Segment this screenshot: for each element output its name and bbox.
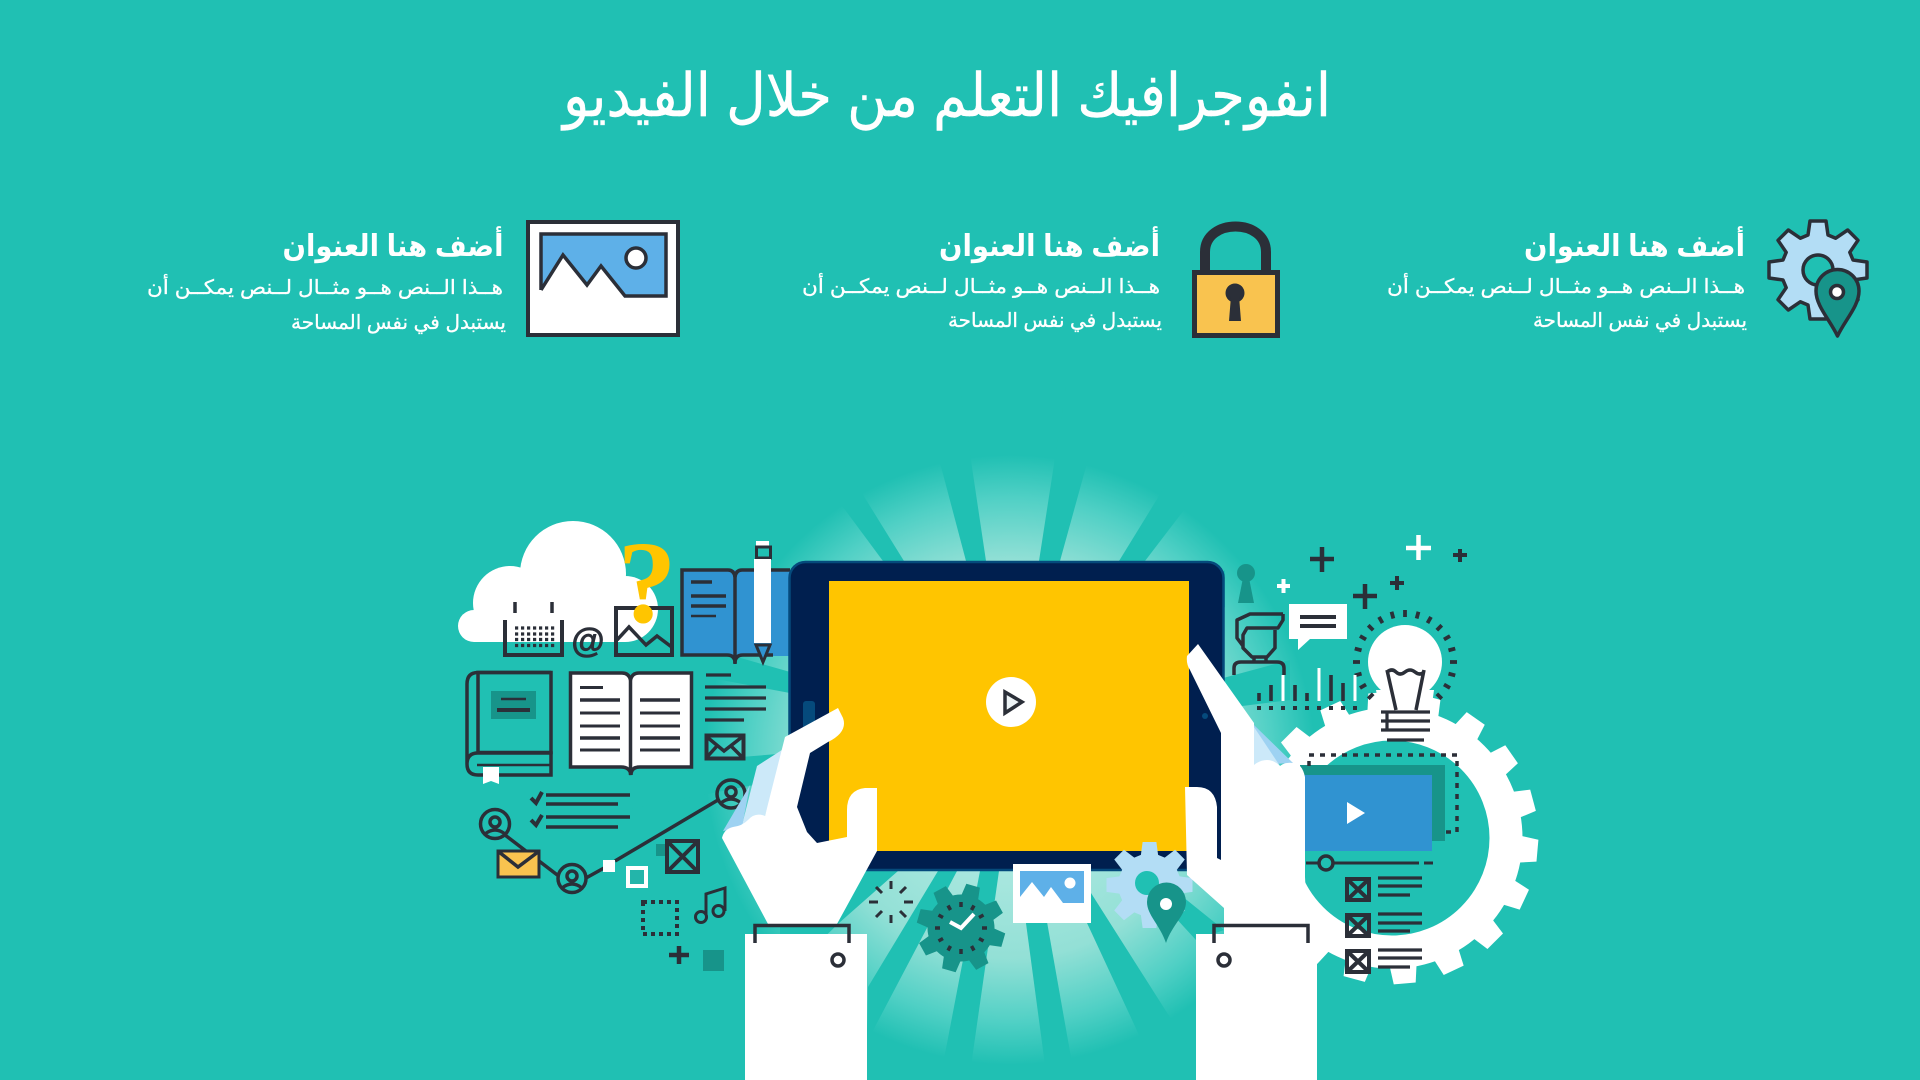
teal square bbox=[703, 950, 724, 971]
icon: at sign: @ bbox=[571, 622, 605, 660]
icon: dark gear with check bbox=[907, 874, 1015, 982]
heading: أضف هنا العنوان bbox=[1524, 226, 1745, 263]
body line 1: هــذا الــنص هــو مثــال لــنص يمكــن أن bbox=[802, 273, 1160, 298]
icon: avatar node c bbox=[717, 780, 745, 808]
icon: crossed box bbox=[667, 841, 698, 872]
icon: speech bubble bbox=[1289, 604, 1347, 650]
right sleeve bbox=[1196, 926, 1317, 1080]
icon: closed book bbox=[467, 672, 551, 784]
icon: person bbox=[1234, 614, 1284, 675]
icon: question mark: ? bbox=[618, 517, 676, 648]
panel: feature middle bbox=[802, 226, 1278, 336]
icon: cloud bbox=[458, 521, 658, 642]
tablet home button bbox=[803, 701, 815, 729]
left sleeve bbox=[745, 926, 867, 1080]
sunburst rays behind tablet bbox=[568, 387, 1315, 1080]
checkbox list bbox=[1347, 878, 1422, 972]
icon: light bulb bbox=[1353, 610, 1457, 740]
icon: dotted square bbox=[643, 902, 677, 934]
icon: text lines bbox=[705, 675, 766, 720]
icon: light blue gear with pin bbox=[1106, 842, 1192, 943]
icon: gear with location pin bbox=[1769, 221, 1867, 336]
body line 2: يستبدل في نفس المساحة bbox=[948, 310, 1162, 333]
icon: open white book bbox=[570, 673, 692, 775]
heading: أضف هنا العنوان bbox=[939, 226, 1160, 263]
icon: picture card bbox=[1013, 864, 1091, 923]
plus signs bbox=[1277, 535, 1467, 609]
panel: feature left bbox=[147, 222, 678, 335]
icon: avatar node b bbox=[558, 864, 586, 892]
icon: outlined square bbox=[628, 868, 646, 886]
right hand bbox=[1185, 644, 1308, 936]
network connections bbox=[480, 780, 745, 892]
icon: avatar node a bbox=[480, 810, 510, 838]
body line 1: هــذا الــنص هــو مثــال لــنص يمكــن أن bbox=[147, 274, 503, 299]
heading: أضف هنا العنوان bbox=[282, 226, 504, 263]
body line 2: يستبدل في نفس المساحة bbox=[291, 312, 506, 335]
icon: checklist bbox=[531, 792, 630, 827]
icon: keyhole bbox=[1237, 564, 1255, 603]
left hand bbox=[722, 708, 877, 924]
bar chart bbox=[1257, 668, 1357, 708]
big white gear bbox=[1245, 691, 1539, 985]
body line 1: هــذا الــنص هــو مثــال لــنص يمكــن أن bbox=[1387, 273, 1745, 298]
icon: padlock bbox=[1194, 226, 1278, 336]
icon: burst bbox=[869, 881, 913, 923]
icon: music notes bbox=[695, 888, 725, 923]
icon: picture outline bbox=[616, 608, 673, 655]
title: انفوجرافيك التعلم من خلال الفيديو bbox=[560, 62, 1331, 131]
icon: blue open book bbox=[681, 570, 790, 664]
play button bbox=[986, 677, 1036, 727]
icon: small envelope bbox=[706, 736, 744, 758]
tablet screen bbox=[829, 581, 1189, 851]
icon: yellow envelope bbox=[498, 851, 539, 877]
icon: framed picture bbox=[528, 222, 678, 335]
white node square bbox=[603, 860, 615, 872]
panel: feature right bbox=[1387, 221, 1867, 336]
icon: pen bbox=[754, 541, 771, 662]
teal small square bbox=[656, 844, 665, 856]
icon: plus bbox=[669, 946, 689, 964]
tablet bbox=[790, 562, 1224, 870]
body line 2: يستبدل في نفس المساحة bbox=[1533, 310, 1747, 333]
video player bbox=[1300, 755, 1457, 870]
icon: calendar bbox=[505, 602, 562, 655]
